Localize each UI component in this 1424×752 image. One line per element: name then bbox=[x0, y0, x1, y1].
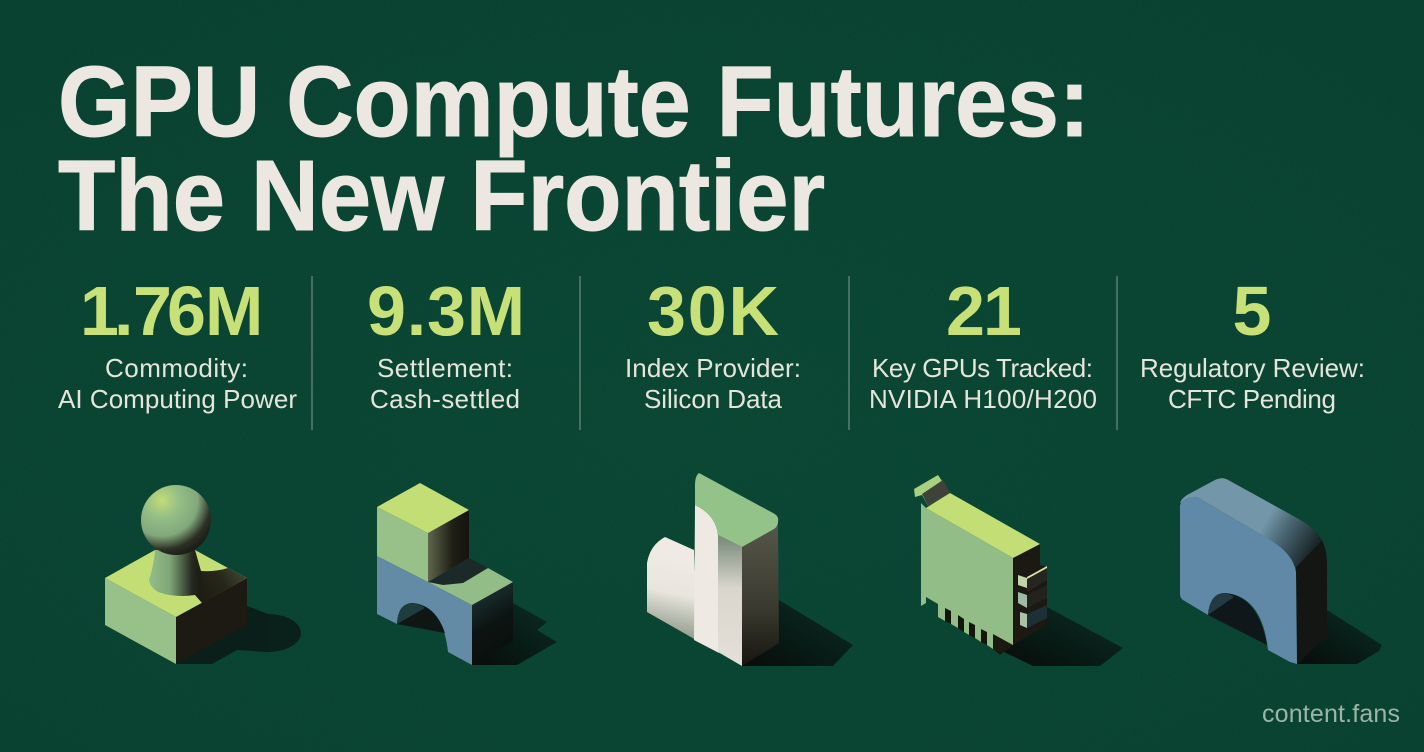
stat: key GPUs: NVIDIA H100/H200 bbox=[869, 384, 1097, 414]
stat: index provider: 30K bbox=[647, 272, 779, 350]
stat: settlement: 9.3M bbox=[367, 272, 525, 350]
stat: commodity: Commodity: bbox=[105, 353, 248, 383]
stat: index provider: Index Provider: bbox=[625, 353, 801, 383]
stat: commodity: 1.76M bbox=[80, 272, 263, 350]
stat: settlement bbox=[367, 272, 525, 414]
stat: settlement: Settlement: bbox=[377, 353, 513, 383]
stat: index provider bbox=[625, 272, 801, 414]
title: The New Frontier bbox=[58, 140, 825, 252]
stat: commodity bbox=[58, 272, 297, 414]
stat: regulatory review: 5 bbox=[1233, 272, 1271, 350]
stat: key GPUs bbox=[869, 272, 1097, 414]
icon: joystick block bbox=[105, 485, 301, 664]
icon: blue arch slab bbox=[1180, 478, 1382, 664]
stat: regulatory review: Regulatory Review: bbox=[1140, 353, 1365, 383]
icon: arch and cube bbox=[377, 483, 557, 665]
stat: index provider: Silicon Data bbox=[644, 384, 783, 414]
stat: commodity: AI Computing Power bbox=[58, 384, 297, 414]
stat: regulatory review: CFTC Pending bbox=[1168, 384, 1336, 414]
stat row bbox=[58, 272, 1365, 414]
icon: white towers bbox=[647, 473, 853, 666]
stat: key GPUs: Key GPUs Tracked: bbox=[872, 353, 1093, 383]
title bbox=[58, 46, 1090, 252]
ports bbox=[1018, 566, 1047, 628]
watermark: content.fans bbox=[1262, 700, 1400, 728]
stat: key GPUs: 21 bbox=[946, 272, 1022, 350]
stat: settlement: Cash-settled bbox=[370, 384, 520, 414]
stat: regulatory review bbox=[1140, 272, 1365, 414]
title: GPU Compute Futures: bbox=[58, 46, 1090, 158]
icon: GPU card bbox=[914, 475, 1123, 666]
